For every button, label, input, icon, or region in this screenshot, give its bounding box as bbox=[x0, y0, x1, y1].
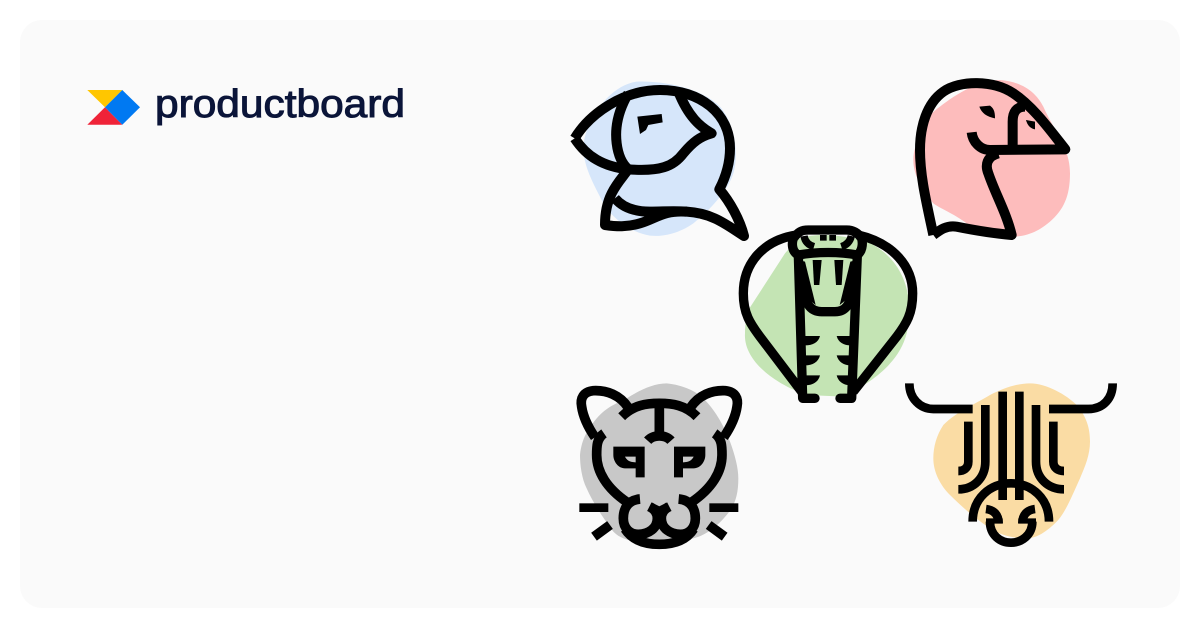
icon: puma bbox=[579, 383, 738, 544]
logo: productboard: productboard bbox=[155, 83, 405, 126]
icon: cobra bbox=[743, 230, 913, 398]
icon: puffin bbox=[575, 82, 744, 236]
icon: goose bbox=[913, 80, 1070, 237]
icon: bull bbox=[909, 383, 1113, 543]
